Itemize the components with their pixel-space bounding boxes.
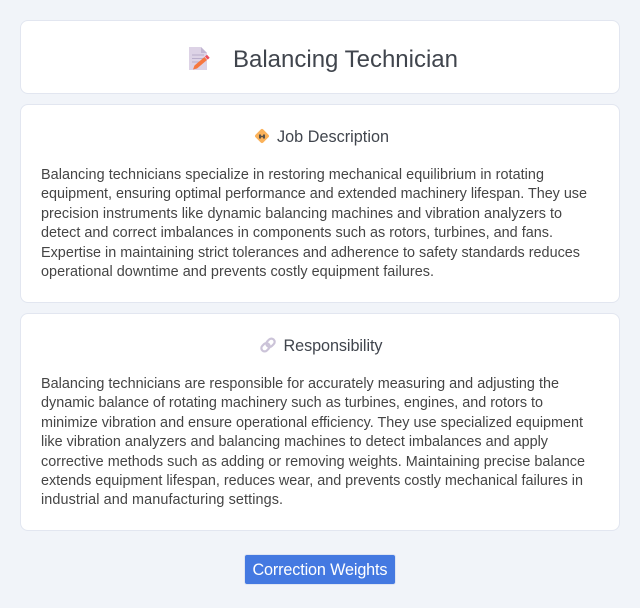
responsibility text xyxy=(41,376,585,508)
title text: Balancing Technician xyxy=(233,46,458,73)
icon: orange diamond xyxy=(254,128,270,144)
job description text: operational downtime and prevents costly equipment failures. xyxy=(41,264,434,280)
heading: job description: Job Description xyxy=(277,128,389,146)
button: correction weights: Correction Weights xyxy=(252,561,388,579)
panel: title xyxy=(20,20,620,94)
job description text xyxy=(41,167,587,280)
responsibility text: dynamic balance of rotating machinery such as turbines, engines, and rotors to xyxy=(41,395,543,411)
job description text: Balancing technicians specialize in restoring mechanical equilibrium in rotating xyxy=(41,167,544,183)
responsibility text: corrective methods such as adding or removing weights. Maintaining precise balance xyxy=(41,454,585,470)
responsibility text: like vibration analyzers and balancing machines to detect imbalances and apply xyxy=(41,434,549,450)
job description text: equipment, ensuring optimal performance and extended machinery lifespan. They use xyxy=(41,186,587,202)
icon: chain link xyxy=(260,337,276,353)
panel: job description xyxy=(20,104,620,303)
responsibility text: Balancing technicians are responsible for accurately measuring and adjusting the xyxy=(41,376,559,392)
responsibility text: minimize vibration and ensure operational efficiency. They use specialized equipment xyxy=(41,415,583,431)
icon: document with pencil xyxy=(189,47,210,70)
responsibility text: extends equipment lifespan, reduces wear, and prevents costly mechanical failures in xyxy=(41,473,583,489)
button: correction weights xyxy=(244,554,396,585)
heading: responsibility: Responsibility xyxy=(284,337,383,355)
job description text: precision instruments like dynamic balancing machines and vibration analyzers to xyxy=(41,206,562,222)
job description text: detect and correct imbalances in components such as rotors, turbines, and fans. xyxy=(41,225,553,241)
responsibility text: industrial and manufacturing settings. xyxy=(41,492,283,508)
panel: responsibility xyxy=(20,313,620,531)
job description text: Expertise in maintaining strict tolerances and adherence to safety standards reduces xyxy=(41,245,580,261)
